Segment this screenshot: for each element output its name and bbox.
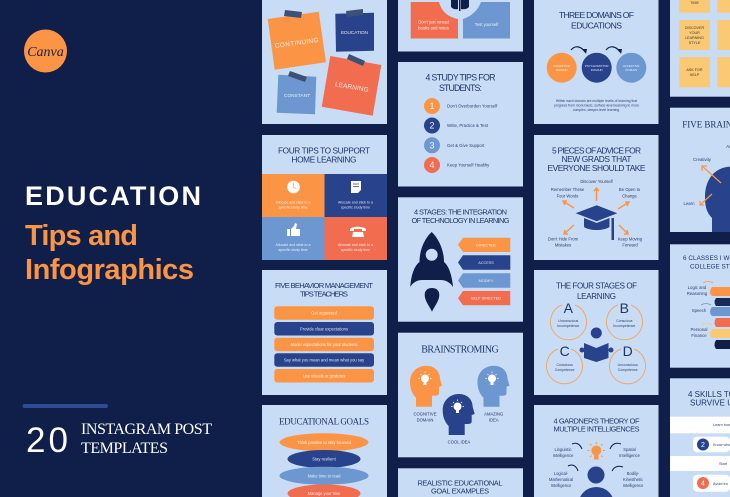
panel: brainstorming — [398, 333, 523, 457]
logo: Canva: Canva — [27, 45, 64, 60]
heading: Tips and Infographics: Tips and — [25, 220, 138, 252]
panel: four tips home learning: FOUR TIPS TO SUPPORT — [278, 146, 370, 156]
panel: 4 skills: Avoid tro — [713, 482, 728, 486]
panel: gardner's theory: 4 GARDNER'S THEORY OF — [554, 416, 640, 426]
panel: four stages of learning: Competence — [618, 368, 638, 372]
panel: three domains: DOMAIN — [591, 68, 603, 72]
panel: sticky grid: DISCOVER — [685, 26, 704, 30]
panel: educational goals: EDUCATIONAL GOALS — [279, 416, 369, 426]
panel: four stages of learning: Incompetence — [557, 324, 579, 328]
panel: three domains: COGNITIVE — [553, 64, 570, 68]
panel: gardner's theory: Spatial — [623, 447, 636, 452]
panel: gardner's theory: Linguistic — [554, 447, 572, 452]
panel: sticky grid: STYLE — [689, 41, 701, 45]
panel: brainstorming: DOMAIN — [417, 418, 433, 422]
panel: 4 study tips: 1 — [429, 101, 435, 111]
panel: behavior management: Model expectations for your students — [291, 342, 357, 347]
panel: three domains: EDUCATIONS — [571, 20, 622, 30]
panel: sticky notes: CONSTANT — [284, 93, 310, 99]
panel: three domains: THREE DOMAINS OF — [559, 10, 634, 20]
panel: study strategies (top): books and notes — [418, 26, 449, 30]
panel: 6 classes — [670, 244, 730, 368]
panel: behavior management — [262, 270, 387, 395]
panel: realistic goals — [398, 468, 523, 497]
template count — [26, 421, 212, 460]
panel: four tips home learning: specific study time — [341, 206, 370, 210]
panel: four stages of learning: Competence — [555, 368, 575, 372]
panel: three domains: PSYCHOMOTOR — [585, 64, 609, 68]
panel: sticky grid: TIME — [690, 1, 699, 5]
panel: four stages of learning: Conscious — [616, 319, 633, 323]
panel: 4 study tips — [398, 62, 523, 186]
panel: advice for new grads: Change — [622, 194, 638, 198]
panel: three domains — [534, 0, 658, 124]
panel: study strategies (top): Don't just reread — [418, 20, 449, 24]
panel: four tips home learning: specific study time — [278, 248, 308, 252]
panel: 4 stages technology: 4 STAGES: THE INTEGRATION — [414, 208, 507, 216]
panel: advice for new grads: Be Open to — [619, 187, 641, 192]
panel: behavior management: Provide clear expectations — [300, 326, 348, 331]
panel: four tips home learning: Allocate and stick to a — [276, 243, 310, 247]
panel: 4 skills: Start — [719, 462, 728, 466]
panel: advice for new grads — [534, 135, 658, 260]
panel: four stages of learning: Unconscious — [618, 363, 638, 367]
panel: three domains: DOMAIN — [556, 68, 568, 72]
panel: three domains: progress from more basic, surface-level learning to more — [554, 104, 639, 108]
panel: sticky grid: LEARNING — [685, 36, 704, 40]
panel: gardner's theory: Intelligence — [623, 483, 644, 488]
panel: gardner's theory: Mathematical — [549, 477, 573, 482]
panel: 4 stages technology: SELF DIRECTED — [471, 297, 501, 301]
panel: three domains: AFFECTIVE — [623, 64, 640, 68]
panel: 6 classes: Finance — [691, 333, 707, 338]
panel: gardner's theory: Kinesthetic — [623, 477, 643, 482]
panel: educational goals — [262, 405, 387, 497]
panel: sticky grid: HELP — [690, 73, 700, 77]
panel: four tips home learning: specific study time — [278, 206, 308, 210]
panel: 4 skills — [670, 378, 730, 497]
panel: five brain — [670, 108, 730, 232]
accent bar — [22, 404, 108, 408]
panel: 4 study tips: Don't Overburden Yourself — [447, 104, 498, 108]
panel: four tips home learning: Allocate and stick to a — [276, 200, 310, 204]
heading: Tips and Infographics — [25, 220, 194, 286]
panel: advice for new grads: Don't Hide From — [548, 236, 579, 242]
panel: four stages of learning: LEARNING — [577, 292, 616, 301]
panel: 6 classes: Logic and — [688, 285, 707, 290]
panel: gardner's theory — [534, 405, 658, 497]
panel: brainstorming: IDEA — [489, 418, 499, 422]
panel: 4 study tips: 4 STUDY TIPS FOR — [426, 72, 496, 82]
panel: 4 stages technology: OF TECHNOLOGY IN LEARNING — [412, 216, 510, 225]
panel: 4 skills: 2 — [701, 442, 705, 449]
panel: gardner's theory: MULTIPLE INTELLIGENCES — [554, 424, 640, 434]
panel: 4 study tips: 3 — [429, 140, 435, 150]
panel: educational goals: Manage your time — [308, 491, 341, 496]
panel: 4 stages technology: DIRECTED — [476, 243, 496, 247]
panel: four stages of learning: C — [560, 343, 570, 359]
panel: behavior management: FIVE BEHAVIOR MANAGEMENT — [275, 281, 373, 290]
panel: four tips home learning: HOME LEARNING — [292, 154, 356, 164]
panel: sticky notes — [262, 0, 387, 124]
panel: four stages of learning: Unconscious — [558, 319, 579, 323]
panel: advice for new grads: Remember These — [551, 187, 585, 192]
panel: 4 stages technology: ACCESS — [478, 261, 494, 265]
panel: gardner's theory: Intelligence — [551, 483, 572, 488]
panel: advice for new grads: Discover Yourself — [580, 179, 614, 184]
panel: sticky notes: EDUCATION — [341, 30, 369, 36]
panel: five brain: Creativity — [693, 157, 712, 162]
panel: four stages of learning: D — [623, 343, 633, 359]
panel: educational goals: Stay resilient — [312, 457, 337, 462]
panel: advice for new grads: Mistakes — [555, 242, 571, 248]
panel: gardner's theory: Intelligence — [619, 453, 641, 458]
panel: five brain: Learn — [684, 201, 695, 206]
panel: 4 skills: 4 — [701, 480, 705, 488]
panel: sticky grid: ASK FOR — [686, 68, 703, 72]
panel: behavior management: TIPS TEACHERS — [300, 290, 348, 298]
template count: TEMPLATES — [81, 440, 168, 457]
panel: educational goals: Make time to read — [308, 473, 341, 478]
panel: advice for new grads: Forward — [622, 242, 638, 248]
panel: three domains: DOMAIN — [625, 68, 637, 72]
panel: 4 stages technology: MODIFY — [479, 279, 494, 283]
panel: four tips home learning — [262, 135, 387, 260]
panel: 4 study tips: 2 — [429, 120, 435, 130]
panel: sticky notes: LEARNING — [334, 81, 369, 94]
panel: behavior management: Get organized — [311, 310, 338, 316]
panel: sticky notes: CONTINUING — [275, 37, 319, 50]
panel: study strategies (top): Test yourself — [475, 22, 499, 27]
panel: four stages of learning: A — [564, 300, 574, 316]
panel: advice for new grads: Four Words — [557, 194, 578, 198]
template count: 20 — [26, 421, 68, 460]
panel: three domains: complex, deeper-level learning. — [573, 108, 620, 112]
panel: realistic goals: GOAL EXAMPLES — [431, 486, 489, 496]
panel: four stages of learning: Conscious — [557, 363, 573, 367]
panel: sticky grid — [670, 0, 730, 97]
panel: brainstorming: AMAZING — [484, 412, 503, 416]
panel: advice for new grads: 5 PIECES OF ADVICE FOR — [552, 146, 641, 156]
panel: sticky grid: YOUR — [689, 31, 700, 35]
panel: 6 classes: Reasoning — [687, 291, 708, 296]
panel: four stages of learning — [534, 270, 658, 395]
panel: brainstorming: COGNITIVE — [413, 412, 437, 416]
template count: INSTAGRAM POST — [81, 421, 212, 438]
panel: gardner's theory: Bodily- — [627, 471, 640, 476]
panel: educational goals: Think positive to stay focused — [297, 440, 352, 445]
panel: realistic goals: REALISTIC EDUCATIONAL — [418, 478, 502, 488]
panel: 4 study tips: Get & Give Support — [447, 143, 485, 148]
panel: 6 classes: Speech — [692, 308, 707, 313]
panel: four tips home learning: Allocate and stick to a — [338, 243, 373, 247]
panel: study strategies (top) — [398, 0, 523, 52]
panel: advice for new grads: EVERYONE SHOULD TAKE — [548, 163, 646, 173]
logo: Canva — [24, 30, 67, 72]
panel: behavior management: Use visuals or gestures — [303, 373, 345, 378]
panel: 4 study tips: STUDENTS: — [439, 83, 482, 93]
panel: behavior management: Say what you mean and mean what you say — [284, 358, 365, 362]
panel: four tips home learning: Allocate and stick to a — [338, 200, 373, 204]
panel: four tips home learning: specific study time — [341, 248, 370, 252]
heading: Education: EDUCATION — [25, 181, 201, 211]
panel: advice for new grads: Keep Moving — [618, 236, 643, 242]
panel: four stages of learning: B — [620, 300, 629, 316]
panel: gardner's theory: Intelligence — [553, 453, 574, 458]
panel: advice for new grads: NEW GRADS THAT — [562, 154, 632, 164]
panel: three domains: Within each domain are multiple levels of learning that — [556, 99, 637, 103]
panel: four stages of learning: Incompetence — [613, 324, 635, 328]
panel: brainstorming: COOL IDEA — [448, 440, 471, 444]
panel: gardner's theory: Logical- — [554, 471, 569, 476]
panel: 6 classes: Personal — [691, 327, 708, 332]
panel: 4 study tips: Write, Practice & Test — [447, 123, 489, 128]
panel: 4 study tips: Keep Yourself Healthy — [447, 163, 490, 168]
panel: 4 stages technology — [398, 197, 523, 322]
panel: 4 study tips: 4 — [429, 160, 435, 170]
panel: brainstorming: BRAINSTROMING — [421, 344, 499, 356]
panel: four stages of learning: THE FOUR STAGES OF — [556, 282, 637, 290]
heading: Tips and Infographics: Infographics — [25, 254, 194, 286]
